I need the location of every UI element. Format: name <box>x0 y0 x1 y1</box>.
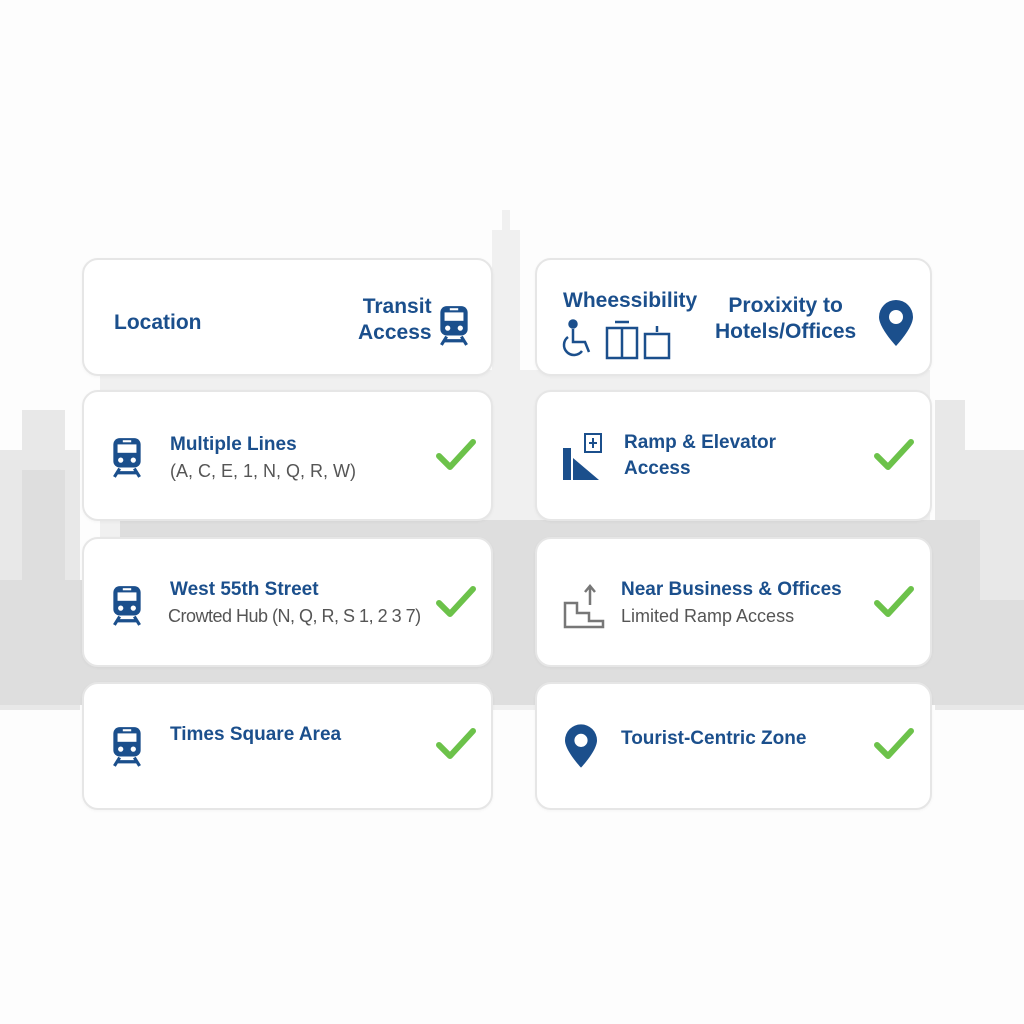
heading: Transit Access: Access <box>358 321 432 344</box>
icon: stairs <box>564 584 604 628</box>
text: crowded hub: Crowted Hub (N, Q, R, S 1, 2 3 7) <box>168 606 421 626</box>
card: Times Square Area <box>82 682 493 810</box>
icon: check <box>874 728 914 759</box>
heading: Proxixity to Hotels/Offices <box>715 294 856 343</box>
text: West 55th Street: West 55th Street <box>170 579 319 600</box>
icon: train <box>113 727 141 767</box>
heading: Proxixity to Hotels/Offices: Hotels/Offices <box>715 320 856 343</box>
text: Near Business & Offices: Near Business & Offices <box>621 579 842 600</box>
text: Times Square Area: Times Square Area <box>170 724 341 745</box>
card: Ramp & Elevator <box>535 390 932 521</box>
card: Tourist-Centric Zone <box>535 682 932 810</box>
text: Ramp & Elevator Access <box>624 432 776 479</box>
card: Near Business & Offices <box>535 537 932 667</box>
icons: wheelchair and elevators <box>562 319 670 360</box>
heading: Transit Access: Transit <box>363 295 432 318</box>
heading: Location: Location <box>114 311 202 334</box>
icon: train <box>113 586 141 626</box>
icon: check <box>436 728 476 759</box>
icon: check <box>436 439 476 470</box>
icon: check <box>874 586 914 617</box>
icon: train <box>113 438 141 478</box>
icon: location pin <box>879 300 913 346</box>
icon: train <box>440 306 468 346</box>
heading: Wheessibility: Wheessibility <box>563 289 697 312</box>
icon: location pin <box>565 724 597 768</box>
icon: check <box>436 586 476 617</box>
icon: ramp elevator <box>563 433 602 480</box>
card: header right <box>535 258 932 376</box>
text: Tourist-Centric Zone: Tourist-Centric Zone <box>621 728 806 749</box>
card: header left <box>82 258 493 376</box>
heading: Proxixity to Hotels/Offices: Proxixity to <box>728 294 843 317</box>
text: limited ramp: Limited Ramp Access <box>621 606 794 626</box>
text: Ramp & Elevator Access: Access <box>624 458 691 479</box>
icon: check <box>874 439 914 470</box>
text: Multiple Lines: Multiple Lines <box>170 434 297 455</box>
card: Multiple Lines <box>82 390 493 521</box>
text: line list: (A, C, E, 1, N, Q, R, W) <box>170 461 356 481</box>
heading: Transit Access <box>358 295 432 344</box>
card: West 55th Street <box>82 537 493 667</box>
text: Ramp & Elevator Access: Ramp & Elevator <box>624 432 776 453</box>
